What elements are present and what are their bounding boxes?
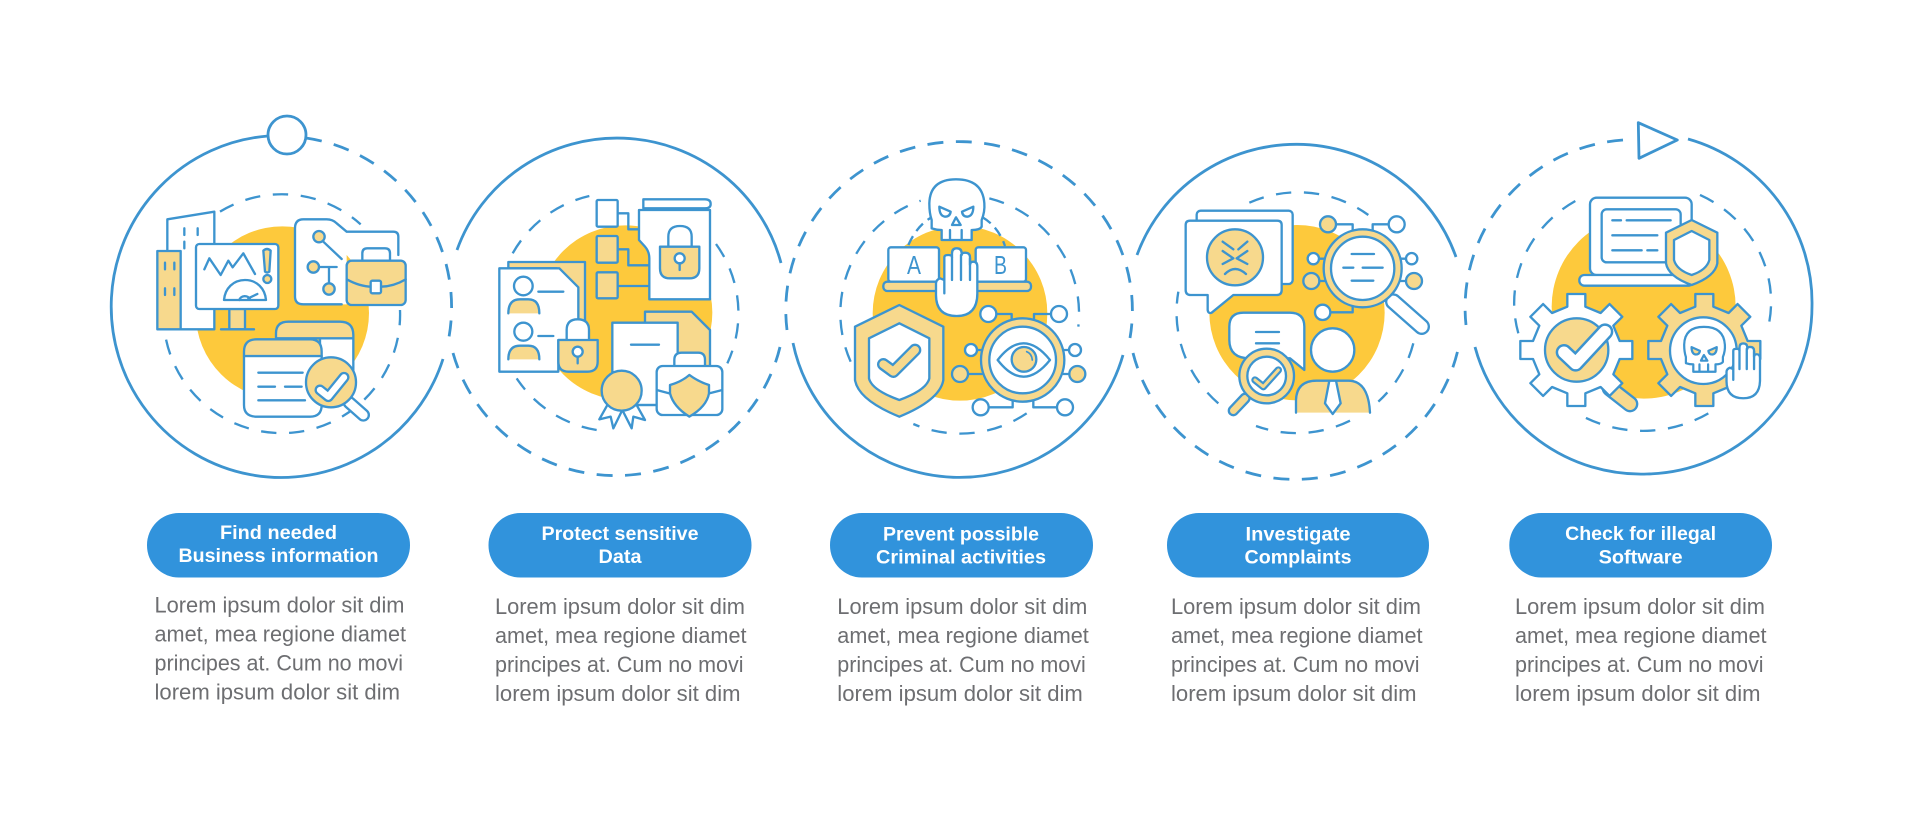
icon: criminal activity prevention cluster <box>840 179 1085 434</box>
text block: step 3: principes at. Cum no movi <box>837 652 1086 677</box>
text block: step 3: Lorem ipsum dolor sit dim <box>837 594 1087 619</box>
icon: complaint investigation cluster <box>1177 192 1422 433</box>
text block: step 3: lorem ipsum dolor sit dim <box>837 681 1083 706</box>
panel: step 1 find business information <box>111 116 452 704</box>
text block: step 1 <box>154 592 406 704</box>
icon: software check cluster <box>1514 195 1771 431</box>
heading pill: step 5 <box>1509 513 1772 578</box>
outer ring <box>786 142 1132 477</box>
heading pill: step 1 <box>147 513 410 578</box>
heading pill: step 4: Investigate <box>1246 524 1350 546</box>
text block: step 4: amet, mea regione diamet <box>1171 623 1422 648</box>
heading pill: step 2 <box>488 513 752 578</box>
text block: step 4: lorem ipsum dolor sit dim <box>1171 681 1416 706</box>
heading pill: step 2: Protect sensitive <box>542 524 698 545</box>
heading pill: step 1: Business information <box>178 546 378 567</box>
text block: step 2: principes at. Cum no movi <box>495 652 744 677</box>
text block: step 5: principes at. Cum no movi <box>1515 652 1764 677</box>
heading pill: step 3: Prevent possible <box>883 524 1039 546</box>
text block: step 4: principes at. Cum no movi <box>1171 652 1420 677</box>
heading pill: step 5: Software <box>1599 548 1683 568</box>
text block: step 1: principes at. Cum no movi <box>154 650 403 676</box>
heading pill: step 2: Data <box>598 547 642 568</box>
text block: step 5: lorem ipsum dolor sit dim <box>1515 681 1760 706</box>
outer ring with start node <box>111 116 452 477</box>
panel: step 2 protect sensitive data <box>453 138 781 706</box>
heading pill: step 3 <box>830 513 1093 578</box>
outer ring <box>1133 144 1459 479</box>
text block: step 2: amet, mea regione diamet <box>495 623 746 648</box>
outer ring with end arrow <box>1465 123 1812 474</box>
icon label: laptop letter B: B <box>994 250 1007 280</box>
text block: step 1: lorem ipsum dolor sit dim <box>154 680 400 704</box>
text block: step 2 <box>495 594 746 706</box>
panel: step 4 investigate complaints <box>1133 144 1459 706</box>
text block: step 3 <box>837 594 1089 706</box>
outer ring <box>453 138 781 476</box>
text block: step 2: Lorem ipsum dolor sit dim <box>495 594 745 619</box>
panel: step 5 check for illegal software <box>1465 123 1812 706</box>
icon: business data cluster <box>157 194 406 433</box>
heading pill: step 1: Find needed <box>220 523 337 544</box>
text block: step 4: Lorem ipsum dolor sit dim <box>1171 594 1421 619</box>
text block: step 3: amet, mea regione diamet <box>837 623 1089 648</box>
text block: step 1: Lorem ipsum dolor sit dim <box>154 592 404 618</box>
heading pill: step 4 <box>1167 513 1429 578</box>
text block: step 2: lorem ipsum dolor sit dim <box>495 681 740 706</box>
heading pill: step 4: Complaints <box>1244 548 1352 568</box>
panel: step 3 prevent criminal activities <box>786 142 1132 706</box>
heading pill: step 5: Check for illegal <box>1565 524 1716 545</box>
text block: step 1: amet, mea regione diamet <box>154 622 406 646</box>
icon: data protection cluster <box>499 196 738 430</box>
text block: step 4 <box>1171 594 1422 706</box>
text block: step 5: amet, mea regione diamet <box>1515 623 1766 648</box>
icon label: laptop letter A: A <box>907 250 922 280</box>
text block: step 5: Lorem ipsum dolor sit dim <box>1515 594 1765 619</box>
heading pill: step 3: Criminal activities <box>876 548 1046 568</box>
text block: step 5 <box>1515 594 1766 706</box>
